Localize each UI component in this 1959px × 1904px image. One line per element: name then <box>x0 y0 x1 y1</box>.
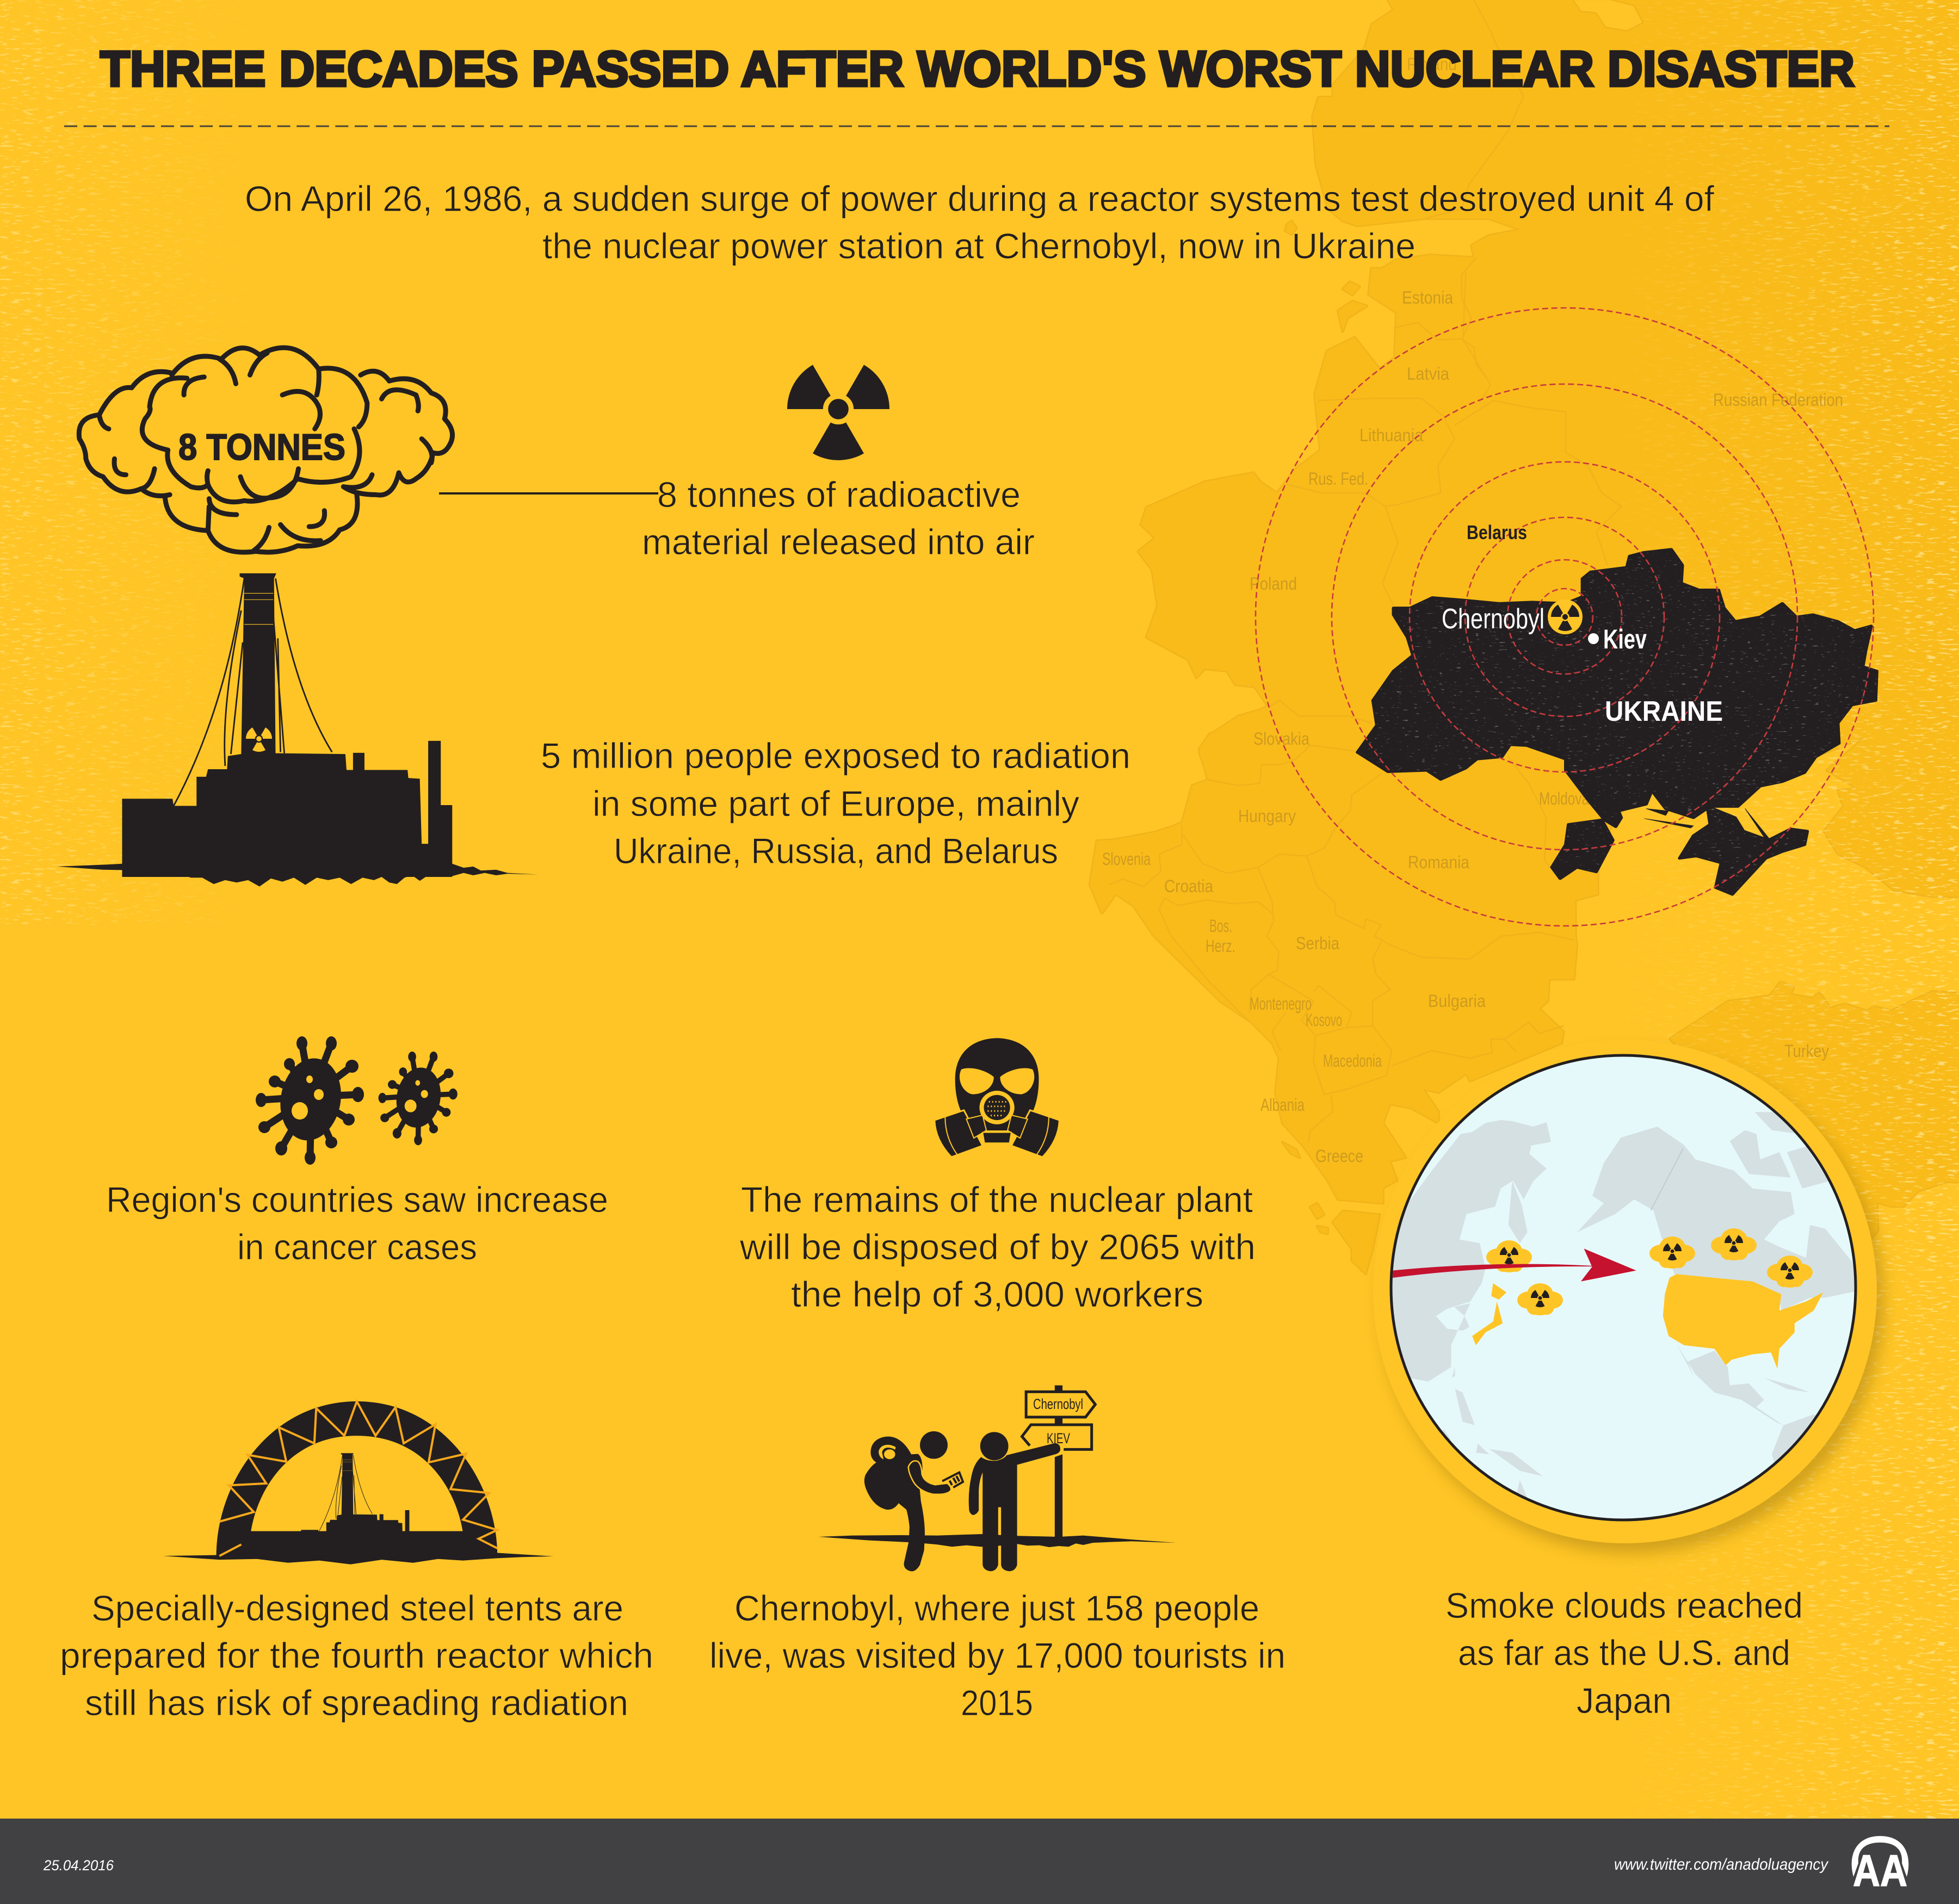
icon: radiation symbol <box>781 361 895 460</box>
country labels: Hungary <box>1238 806 1296 826</box>
radiation spread rings <box>1256 308 1874 926</box>
ground strip <box>818 1534 1176 1547</box>
country labels: Serbia <box>1296 934 1339 953</box>
country labels: Romania <box>1408 852 1469 872</box>
intro text <box>245 178 1715 266</box>
Ukraine scratch texture <box>1349 544 1893 898</box>
text: steel tents: prepared for the fourth reactor which <box>60 1635 653 1676</box>
country labels: Lithuania <box>1359 425 1423 445</box>
icon: nuclear plant silhouette <box>57 573 538 887</box>
text: steel tents: still has risk of spreading radiation <box>85 1683 628 1723</box>
text: cancer increase: in cancer cases <box>237 1227 477 1267</box>
Japan highlighted <box>1472 1283 1506 1345</box>
globe: yellow halo <box>1373 1040 1877 1543</box>
Central and South America <box>1676 1343 1829 1466</box>
title divider <box>64 125 1889 127</box>
map label: Chernobyl: Chernobyl <box>1442 603 1544 635</box>
text: smoke clouds: as far as the U.S. and <box>1458 1633 1790 1673</box>
country labels: Macedonia <box>1323 1051 1382 1071</box>
arrow: smoke path <box>1393 1248 1636 1282</box>
text: tourists <box>709 1588 1286 1723</box>
label: 8 tonnes: 8 TONNES <box>178 426 345 468</box>
text: steel tents <box>60 1588 653 1723</box>
country labels: Latvia <box>1407 364 1449 384</box>
intro text: the nuclear power station at Chernobyl, now in Ukraine <box>542 226 1416 266</box>
backpacker <box>920 1431 948 1459</box>
text: smoke clouds: Smoke clouds reached <box>1445 1585 1803 1625</box>
text: 8 tonnes released: material released into air <box>642 522 1035 562</box>
country labels: Turkey <box>1784 1041 1829 1061</box>
country labels: Slovakia <box>1253 729 1309 749</box>
icon: radiation cloud near Korea <box>1486 1240 1532 1272</box>
country labels: Kosovo <box>1306 1010 1342 1030</box>
text: remains of the plant: The remains of the nuclear plant <box>741 1179 1253 1220</box>
text: tourists: Chernobyl, where just 158 people <box>734 1588 1259 1628</box>
icon: Chernobyl radiation marker <box>1548 599 1583 634</box>
country labels: Albania <box>1260 1095 1305 1115</box>
footer date: 25.04.2016 <box>43 1857 114 1874</box>
text: 8 tonnes released: 8 tonnes of radioactive <box>657 474 1021 515</box>
intro text: On April 26, 1986, a sudden surge of power during a reactor systems test destroyed unit 4 of <box>245 178 1715 219</box>
icon: radiation cloud near Japan <box>1517 1283 1563 1315</box>
country labels: Herz. <box>1206 936 1235 956</box>
globe: world map inset <box>1379 1055 1859 1520</box>
text: cancer increase: Region's countries saw increase <box>106 1179 608 1220</box>
map labels: Belarus: Belarus <box>1467 521 1527 543</box>
text: 8 tonnes released <box>642 474 1035 562</box>
footer url: www.twitter.com/anadoluagency <box>1614 1856 1829 1874</box>
map: Ukraine silhouette <box>1357 549 1877 894</box>
icon: viruses <box>256 1036 458 1165</box>
icon: gas mask <box>935 1038 1059 1157</box>
country labels: Bos. <box>1209 916 1232 936</box>
map label: Kiev <box>1588 624 1647 654</box>
Asia land <box>1379 1120 1551 1498</box>
country labels: Montenegro <box>1250 994 1312 1013</box>
icon: steel dome over reactor <box>163 1401 554 1565</box>
map: regional base map of eastern Europe <box>1090 0 1959 1274</box>
map label: Ukraine: UKRAINE <box>1605 696 1723 727</box>
text: remains of the plant: the help of 3,000 workers <box>791 1274 1203 1314</box>
icon: tourists at signpost <box>818 1386 1176 1571</box>
logo: Anadolu Agency: AA <box>1853 1846 1907 1896</box>
sign text: Chernobyl: Chernobyl <box>1033 1396 1083 1412</box>
text: tourists: live, was visited by 17,000 tourists in <box>709 1635 1286 1676</box>
text: smoke clouds: Japan <box>1577 1680 1672 1721</box>
signs <box>1026 1392 1095 1417</box>
sign post <box>1055 1386 1062 1538</box>
country labels: Croatia <box>1164 876 1213 896</box>
country labels: Greece <box>1315 1146 1363 1166</box>
country labels: Russian Federation <box>1713 390 1843 410</box>
icon: radiation cloud US east <box>1767 1256 1813 1288</box>
country borders <box>1109 0 1621 1142</box>
text: cancer increase <box>106 1179 608 1267</box>
connector line <box>439 492 658 494</box>
country labels: Finland <box>1407 54 1457 74</box>
icon: radiation cloud Canada <box>1711 1228 1757 1260</box>
text: remains of the plant: will be disposed of by 2065 with <box>739 1227 1256 1267</box>
text: 5 million exposed: 5 million people exposed to radiation <box>541 735 1130 776</box>
text: 5 million exposed: in some part of Europe, mainly <box>592 783 1079 824</box>
text: 5 million exposed <box>541 735 1130 871</box>
guide <box>980 1432 1009 1460</box>
icon: smoke cloud with 8 tonnes <box>79 348 453 552</box>
globe: halo shadow <box>1380 1049 1884 1553</box>
text: remains of the plant <box>739 1179 1256 1314</box>
icon: radiation cloud US west <box>1649 1237 1695 1269</box>
USA highlighted <box>1663 1274 1823 1369</box>
text: steel tents: Specially-designed steel tents are <box>91 1588 623 1628</box>
country labels: Estonia <box>1402 288 1453 307</box>
North America land <box>1577 1112 1859 1310</box>
title: THREE DECADES PASSED AFTER WORLD'S WORST NUCLEAR DISASTER <box>100 41 1855 97</box>
text: 5 million exposed: Ukraine, Russia, and Belarus <box>614 831 1058 871</box>
country labels: Poland <box>1250 574 1297 594</box>
footer bar <box>0 1819 1959 1904</box>
country labels: Bulgaria <box>1428 991 1486 1011</box>
country labels: Slovenia <box>1102 849 1151 869</box>
map label: Kiev: Kiev <box>1603 624 1647 654</box>
text: tourists: 2015 <box>961 1683 1033 1723</box>
country labels: Moldova <box>1539 789 1589 808</box>
sign text: Kiev: KIEV <box>1047 1430 1070 1446</box>
country labels <box>1102 54 1843 1166</box>
land silhouette <box>1090 0 1959 1274</box>
text: smoke clouds <box>1445 1585 1803 1721</box>
country labels: Rus. Fed. <box>1308 469 1368 489</box>
